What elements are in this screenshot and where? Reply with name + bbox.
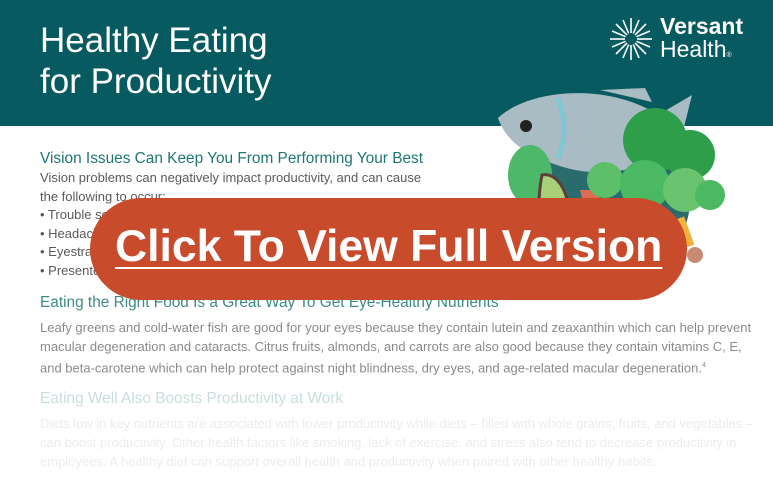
section 1 text: • Eyestrain: [40, 244, 102, 259]
section 3 text: [40, 416, 754, 469]
section 1 text: the following to occur:: [40, 188, 166, 204]
title: for Productivity: [40, 62, 271, 101]
section 1 text: Vision problems can negatively impact productivity, and can cause: [40, 170, 421, 185]
section 3 text: employees. A healthy diet can support overall health and productivity when paired with other healthy habits.: [40, 454, 656, 469]
section 1 text: • Presenteeism: [40, 262, 128, 278]
section 2 heading: Eating the Right Food Is a Great Way To Get Eye-Healthy Nutrients: [40, 294, 499, 311]
button: click to view full version: Click To View Full Version: [115, 222, 662, 271]
header band: [0, 0, 773, 126]
section 3 heading: Eating Well Also Boosts Productivity at Work: [40, 390, 343, 407]
section 2 text: and beta-carotene which can help protect against night blindness, dry eyes, and age-related macular degeneration.4: [40, 360, 706, 375]
section 1 text: • Trouble seeing: [40, 207, 133, 222]
section 1 text: • Headaches: [40, 226, 114, 240]
section 3 text: Diets low in key nutrients are associated with lower productivity while diets – filled with whole grains, fruits, and vegetables –: [40, 416, 753, 431]
logo: Versant: [660, 13, 743, 39]
illustration: fish and vegetables: [498, 88, 725, 263]
title: [40, 21, 272, 101]
section 1 heading: Vision Issues Can Keep You From Performing Your Best: [40, 150, 423, 167]
section 2 text: Leafy greens and cold-water fish are good for your eyes because they contain lutein and zeaxanthin which can help prevent: [40, 320, 751, 335]
section 1 text: [40, 170, 421, 278]
section 2 text: [40, 320, 751, 375]
logo: [610, 13, 743, 62]
logo: Health®: [660, 36, 732, 62]
section 2 text: macular degeneration and cataracts. Citrus fruits, almonds, and carrots are also good because they contain vitamins C, E,: [40, 339, 742, 354]
button: click to view full version: [90, 198, 687, 300]
section 3 text: can boost productivity. Other health factors like smoking, lack of exercise, and stress also tend to decrease productivity in: [40, 435, 736, 450]
title: Healthy Eating: [40, 21, 268, 60]
